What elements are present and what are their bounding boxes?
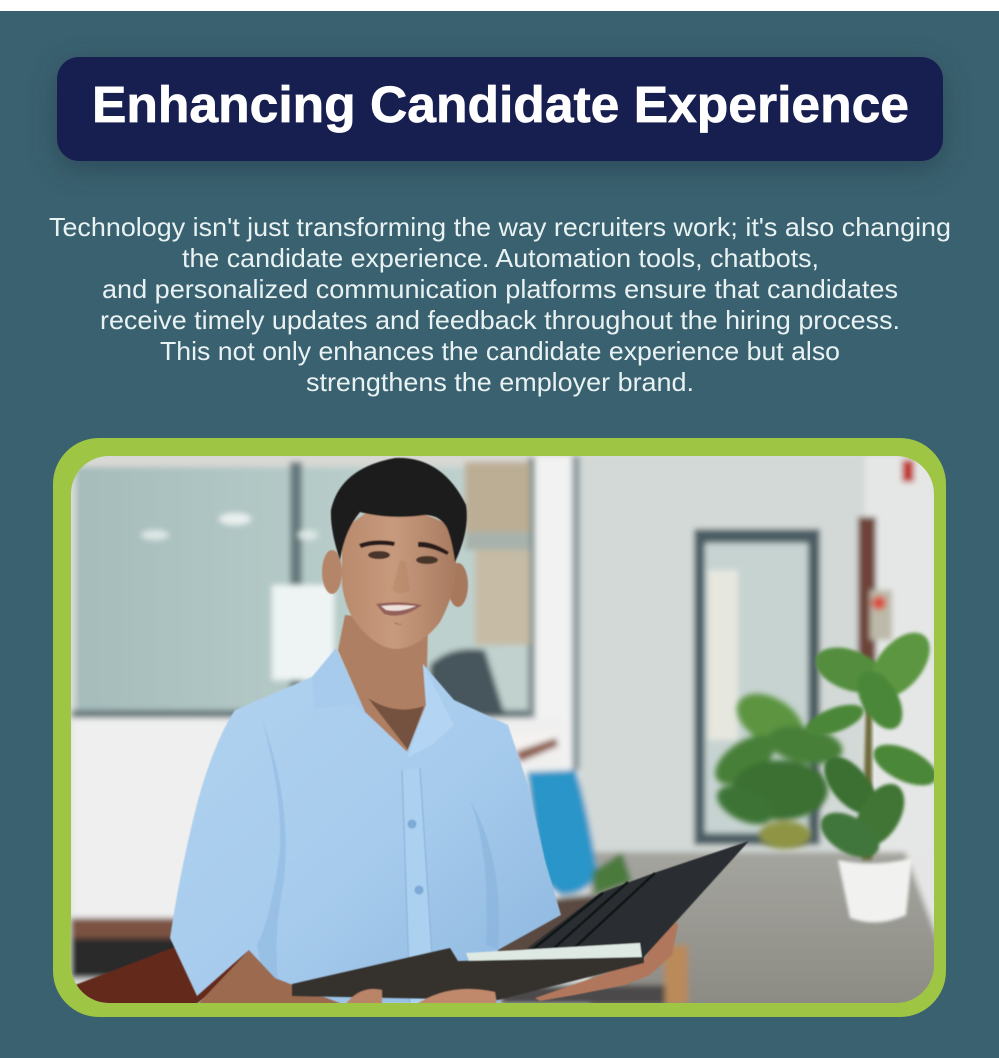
chest hair shadow [368,698,424,750]
pages [466,943,642,963]
small orange chair detail [480,918,492,945]
buttons [408,820,416,828]
folder right cover [526,840,749,958]
person [170,458,561,1005]
title banner [57,57,943,169]
intro text block [49,212,951,397]
bottom hands [345,989,382,1005]
hair [331,458,467,562]
ears [322,550,342,594]
folder left cover [292,948,644,1000]
photo: candidate holding a folder in an office [60,450,950,1012]
placket [406,850,431,1003]
eyes [368,551,390,559]
neck and chest [338,615,428,752]
right hand [535,917,678,1001]
eyebrows [359,540,395,548]
intro text block: the candidate experience. Automation tools, chatbots, [182,243,819,273]
intro text block: This not only enhances the candidate experience but also [160,336,840,366]
nose shade [392,560,410,593]
black folder [292,841,749,1005]
intro text block: Technology isn't just transforming the way recruiters work; it's also changing [49,212,951,242]
office background [60,450,950,1012]
mouth [376,602,422,616]
face [342,509,456,649]
right side shade [472,806,498,945]
sleeve shade [257,730,286,978]
intro text block: receive timely updates and feedback throughout the hiring process. [100,305,900,335]
plant and pot [707,622,943,922]
wooden railing [76,947,249,1003]
collar [312,648,407,755]
left forearm [197,950,345,1005]
title banner: Enhancing Candidate Experience [92,76,909,133]
green photo frame [53,438,946,1017]
intro text block: and personalized communication platforms ensure that candidates [102,274,898,304]
intro text block: strengthens the employer brand. [306,367,694,397]
shirt body [170,648,561,1003]
